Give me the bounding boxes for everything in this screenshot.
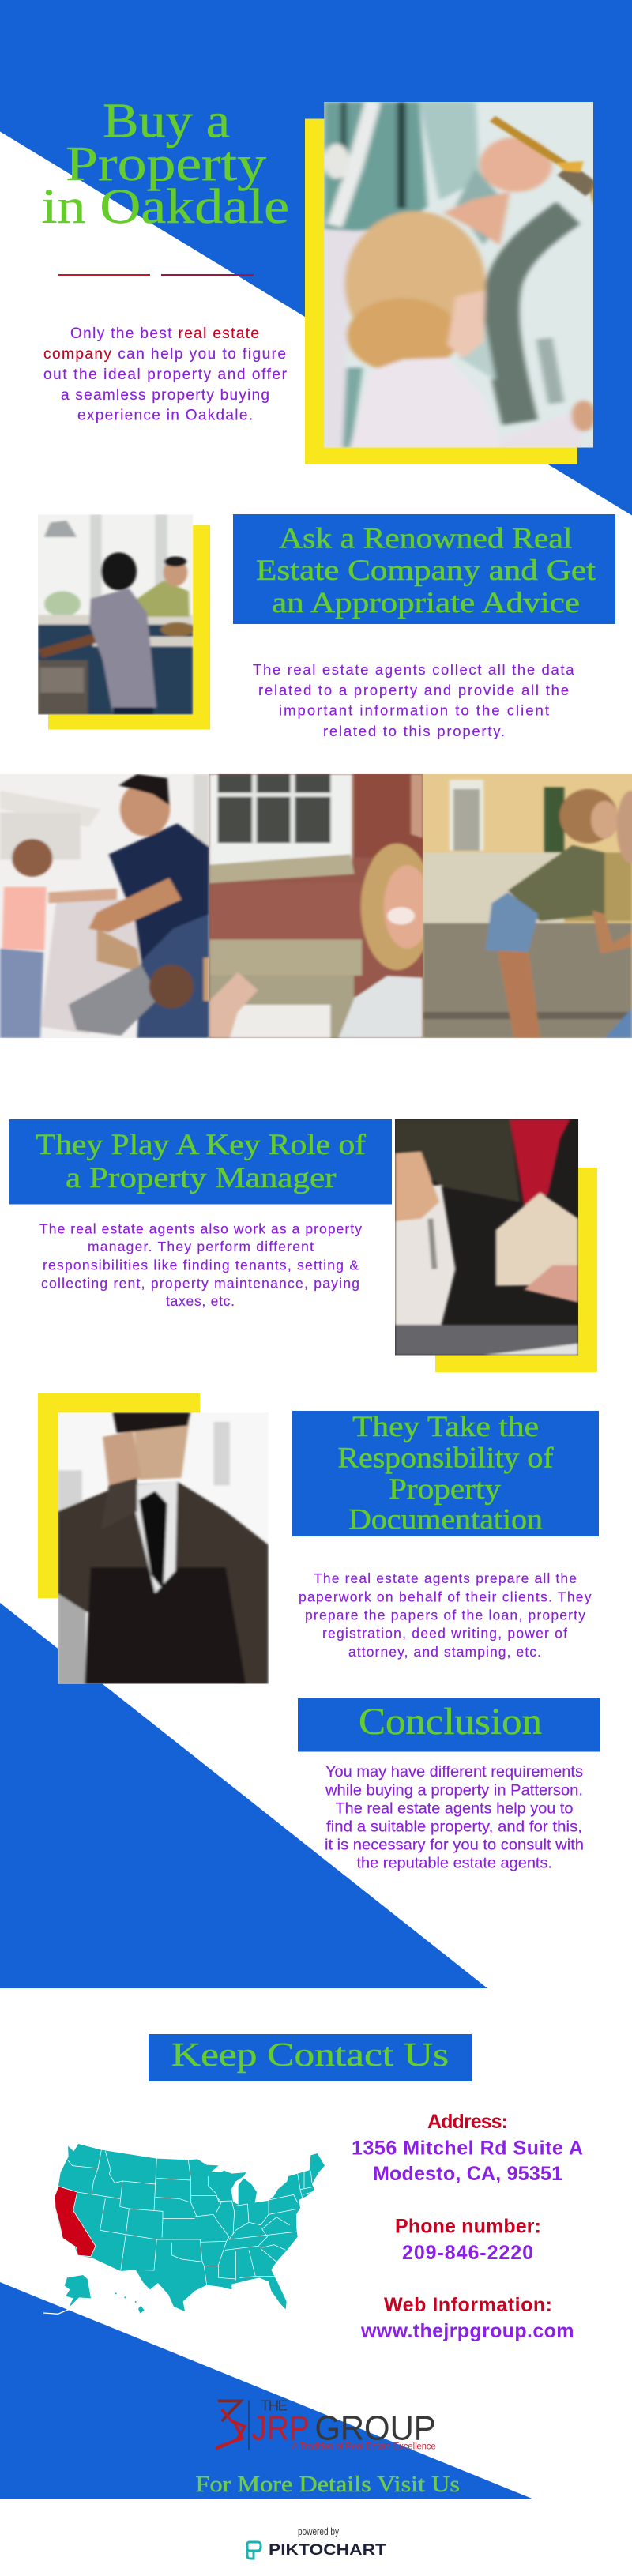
- paragraph: manager. They perform different: [88, 1239, 314, 1254]
- contact details: Phone number:: [395, 2215, 541, 2237]
- paragraph: it is necessary for you to consult with: [325, 1836, 584, 1853]
- heading: an Appropriate Advice: [272, 587, 580, 619]
- photo: laughing woman: [209, 774, 433, 1038]
- paragraph: related to this property.: [323, 723, 505, 739]
- paragraph: collecting rent, property maintenance, paying: [41, 1275, 359, 1291]
- photo: mother and daughter: [423, 774, 632, 1038]
- paragraph: [325, 1763, 584, 1872]
- heading: Keep Contact Us: [171, 2037, 449, 2074]
- title: Property: [66, 137, 266, 191]
- title: Buy a: [103, 95, 230, 149]
- intro paragraph: [43, 325, 288, 423]
- heading: They Take the: [352, 1411, 539, 1443]
- heading: a Property Manager: [66, 1162, 336, 1194]
- photo: key and toy house: [395, 1119, 578, 1356]
- heading: [338, 1411, 554, 1536]
- intro paragraph: experience in Oakdale.: [77, 408, 253, 423]
- intro paragraph: company can help you to figure: [43, 346, 286, 363]
- paragraph: The real estate agents also work as a property: [40, 1221, 362, 1237]
- photo: businessman on phone: [58, 1412, 269, 1684]
- footer: powered by Piktochart: [247, 2526, 386, 2559]
- heading: They Play A Key Role of: [36, 1129, 367, 1161]
- yellow frame: [38, 1393, 200, 1598]
- panel: documentation: [38, 1393, 599, 1684]
- panel: conclusion: [298, 1698, 600, 1872]
- heading box: [233, 514, 615, 624]
- title: [41, 95, 289, 234]
- paragraph: The real estate agents prepare all the: [314, 1570, 577, 1586]
- Alaska: [65, 2275, 91, 2307]
- logo wordmark: GROUP: [314, 2409, 436, 2447]
- contact details: Address:: [427, 2111, 508, 2133]
- paragraph: [40, 1221, 362, 1309]
- contact details: Modesto, CA, 95351: [373, 2163, 562, 2185]
- heading: Conclusion: [359, 1701, 542, 1743]
- Alaska islands: [43, 2309, 70, 2314]
- title: in Oakdale: [41, 180, 289, 234]
- paragraph: [253, 661, 574, 739]
- logo wordmark: [251, 2397, 436, 2452]
- paragraph: [299, 1570, 592, 1660]
- yellow frame: [435, 1168, 597, 1372]
- paragraph: taxes, etc.: [166, 1293, 235, 1309]
- paragraph: The real estate agents collect all the data: [253, 661, 574, 678]
- contact details: www.thejrpgroup.com: [360, 2320, 574, 2342]
- heading: [36, 1129, 367, 1194]
- logo wordmark: JRP: [251, 2409, 310, 2447]
- bottom blue diagonal background: [0, 2282, 532, 2499]
- Hawaii: [115, 2292, 145, 2314]
- heading box: [292, 1411, 599, 1536]
- paragraph: prepare the papers of the loan, property: [305, 1607, 585, 1623]
- logo: The JRP Group: [216, 2397, 436, 2452]
- hero yellow frame: [305, 118, 577, 464]
- paragraph: attorney, and stamping, etc.: [348, 1644, 541, 1660]
- paragraph: related to a property and provide all the: [258, 682, 569, 698]
- heading box: [9, 1119, 392, 1204]
- contiguous states: [55, 2144, 325, 2311]
- logo wordmark: THE: [261, 2397, 288, 2414]
- paragraph: the reputable estate agents.: [357, 1855, 552, 1872]
- Piktochart wordmark: PIKTOCHART: [269, 2542, 386, 2559]
- intro paragraph: a seamless property buying: [61, 387, 269, 404]
- heading: Ask a Renowned Real: [279, 523, 572, 555]
- photo: family moving: [0, 774, 209, 1038]
- map of United States: [43, 2144, 325, 2314]
- heading box: [298, 1698, 600, 1752]
- powered by label: powered by: [298, 2526, 340, 2537]
- paragraph: registration, deed writing, power of: [322, 1626, 567, 1641]
- contact details: Web Information:: [384, 2294, 552, 2316]
- Piktochart icon: [247, 2542, 261, 2559]
- kitchen photo: [38, 514, 194, 715]
- yellow frame: [48, 525, 210, 730]
- contact details: 1356 Mitchel Rd Suite A: [352, 2138, 583, 2160]
- paragraph: The real estate agents help you to: [335, 1799, 574, 1817]
- paragraph: important information to the client: [279, 701, 549, 719]
- photo strip: [0, 774, 632, 1038]
- lower blue diagonal background: [0, 1603, 487, 1988]
- heading box: [149, 2034, 472, 2081]
- state borders: [68, 2150, 314, 2285]
- heading: Responsibility of: [338, 1442, 554, 1474]
- logo wordmark: A Tradition of Real Estate Excellence: [292, 2442, 436, 2452]
- contact details: [352, 2111, 583, 2342]
- panel: property manager: [9, 1119, 597, 1372]
- paragraph: find a suitable property, and for this,: [326, 1818, 582, 1836]
- panel: contact: [43, 2034, 583, 2342]
- panel: ask a company: [38, 514, 615, 739]
- hero photo: child painting a wall: [324, 102, 596, 448]
- paragraph: paperwork on behalf of their clients. They: [299, 1589, 592, 1605]
- California highlighted: [55, 2187, 96, 2257]
- heading: Documentation: [348, 1504, 543, 1536]
- intro paragraph: Only the best real estate: [70, 325, 259, 342]
- heading: [256, 523, 596, 619]
- heading: Property: [389, 1473, 502, 1506]
- paragraph: while buying a property in Patterson.: [325, 1782, 583, 1799]
- top blue diagonal background: [0, 0, 632, 515]
- heading: Estate Company and Get: [256, 555, 596, 587]
- paragraph: You may have different requirements: [325, 1763, 583, 1781]
- paragraph: responsibilities like finding tenants, setting &: [43, 1258, 359, 1273]
- title divider lines: [58, 274, 254, 276]
- contact details: 209-846-2220: [402, 2242, 533, 2264]
- logo mark: [216, 2401, 245, 2449]
- closing call to action: For More Details Visit Us: [196, 2473, 460, 2497]
- intro paragraph: out the ideal property and offer: [43, 367, 288, 383]
